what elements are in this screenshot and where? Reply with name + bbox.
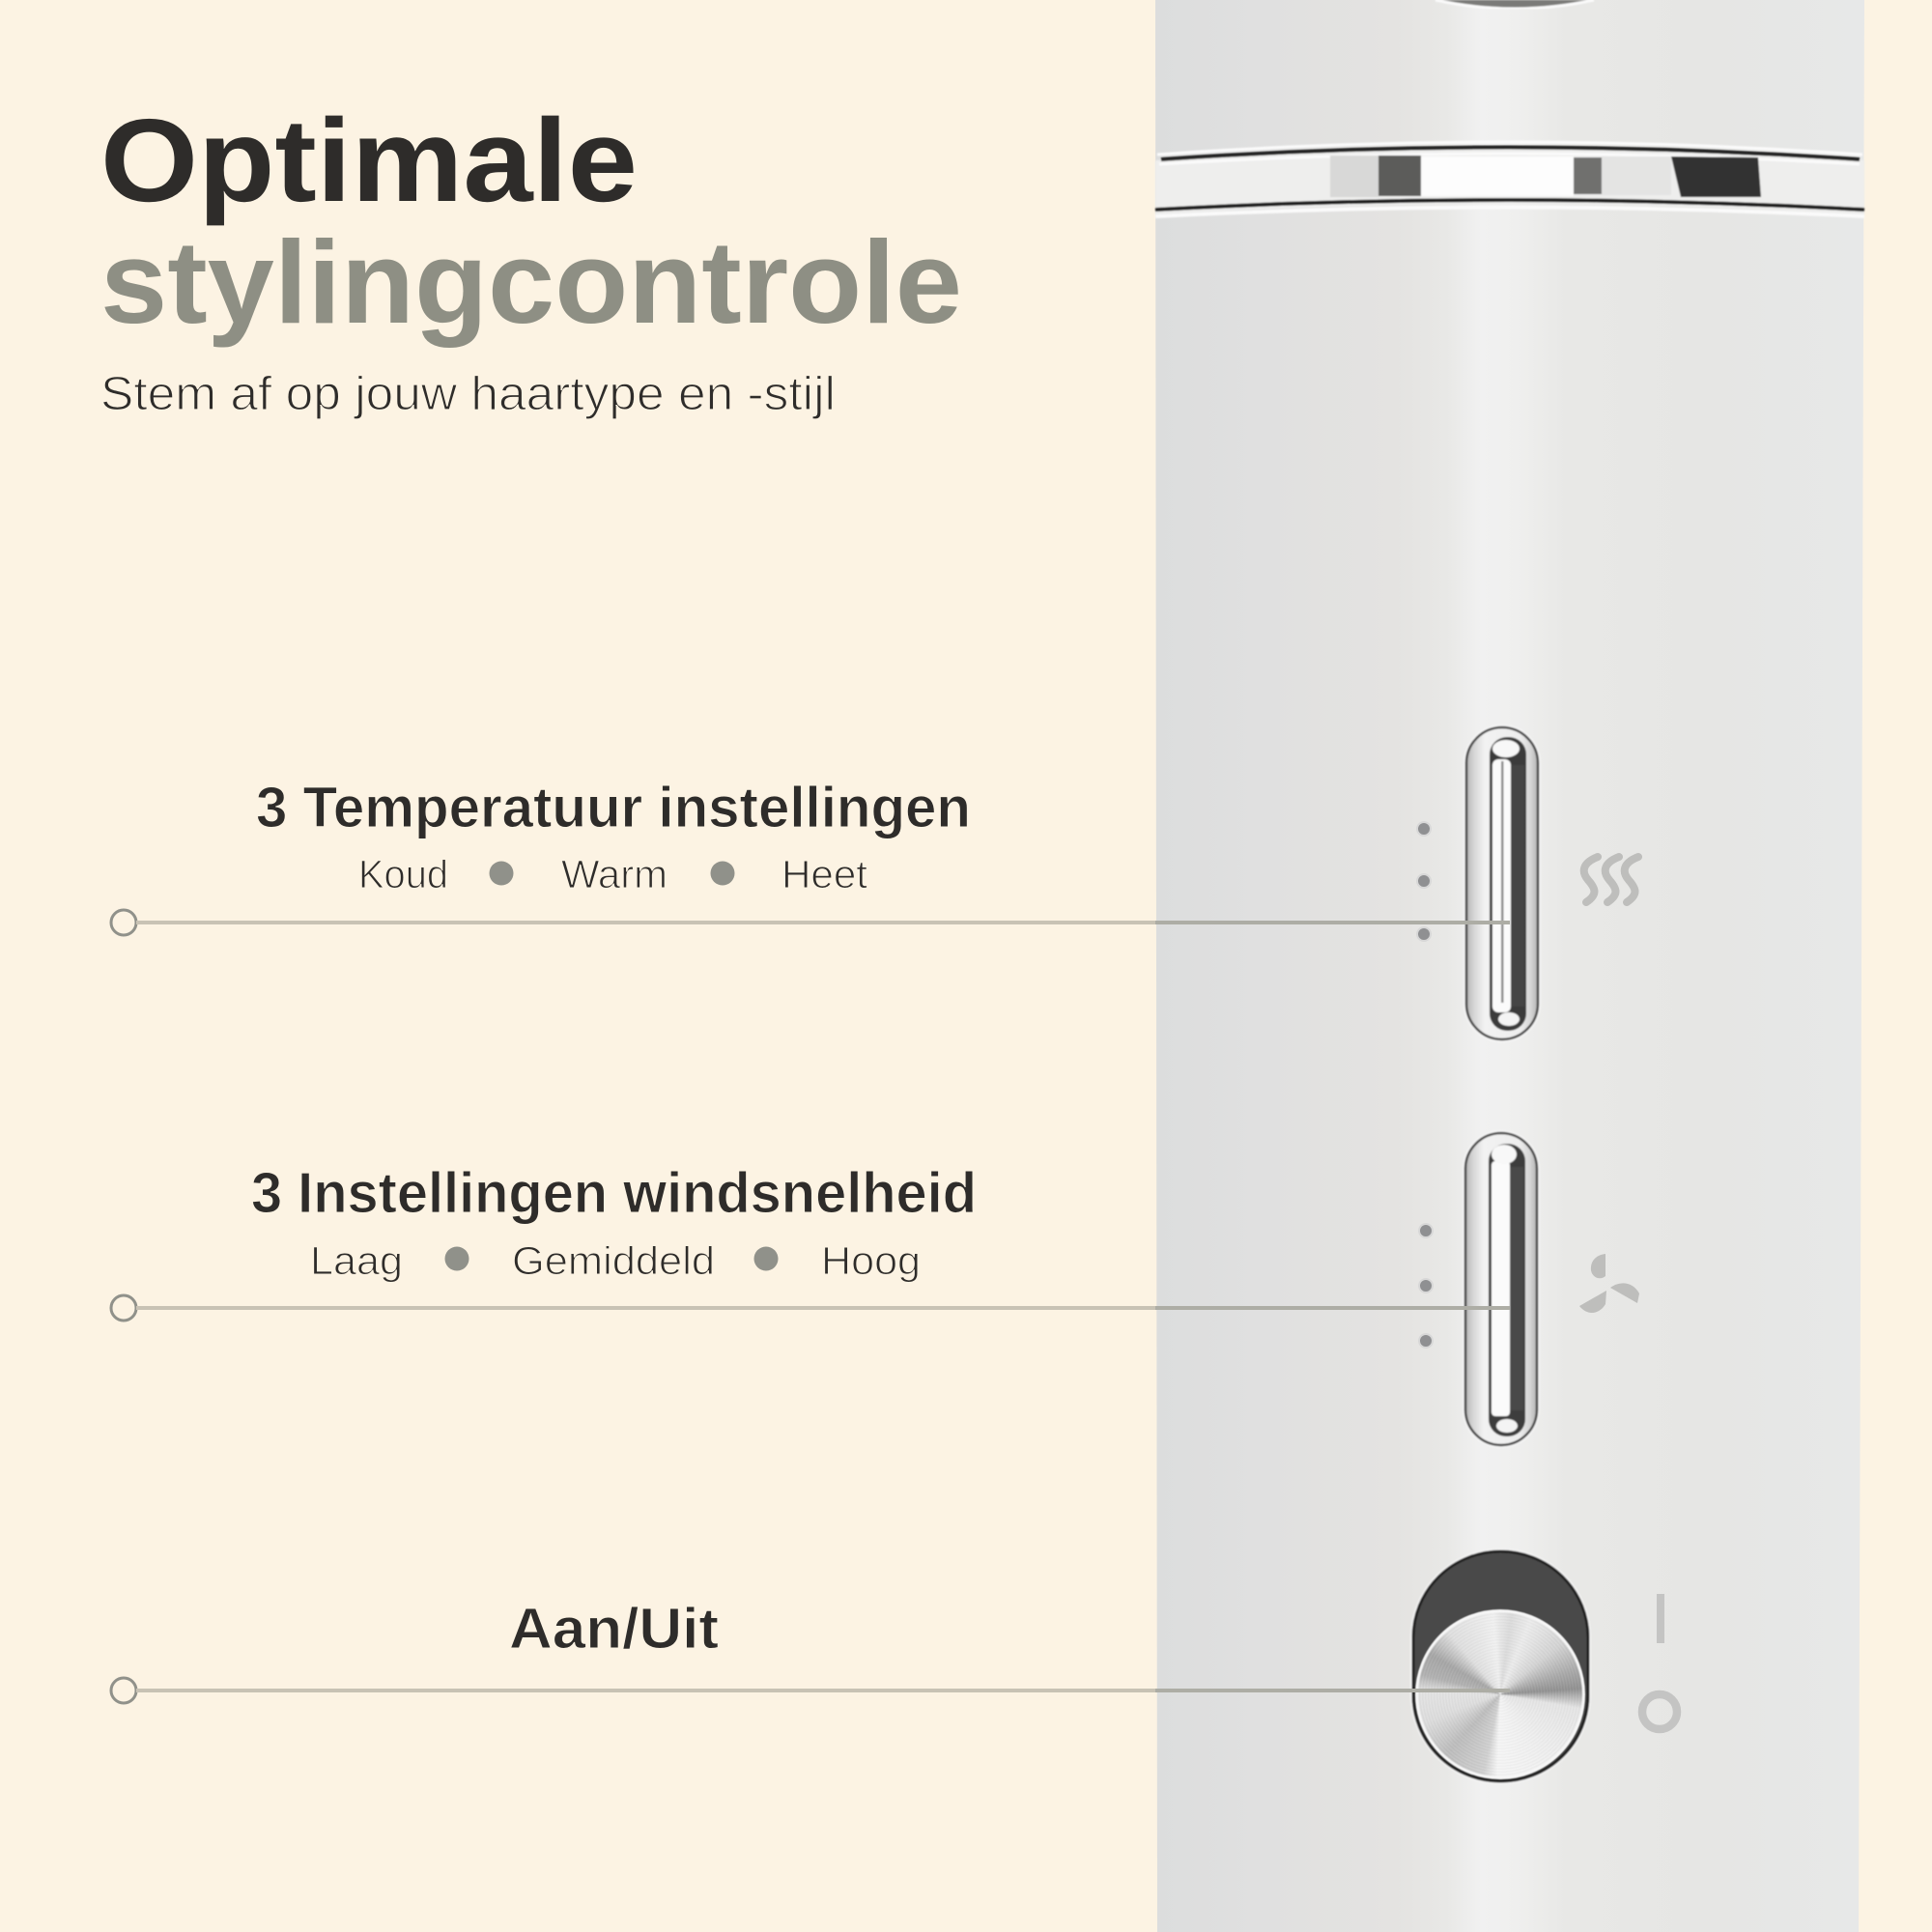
temperature options: Koud [358, 852, 448, 896]
heading: wind speed: 3 Instellingen windsnelheid [251, 1161, 977, 1225]
top chrome detail [1435, 0, 1594, 9]
subtitle: Stem af op jouw haartype en -stijl [100, 368, 836, 420]
metal power knob [1415, 1609, 1585, 1779]
callout: power [111, 1597, 1510, 1703]
callout: wind speed [111, 1161, 1510, 1321]
icon: on mark [1657, 1594, 1664, 1643]
wind speed options [310, 1238, 921, 1283]
callout: temperature [111, 776, 1510, 935]
title: Optimale [100, 95, 638, 226]
temperature indicator dots [1417, 822, 1431, 941]
temperature options [358, 852, 868, 896]
heading: power: Aan/Uit [509, 1597, 719, 1661]
chrome ring [1155, 142, 1864, 216]
title: stylingcontrole [100, 216, 962, 348]
title [100, 95, 962, 348]
heading: temperature: 3 Temperatuur instellingen [256, 776, 971, 839]
wind speed indicator dots [1419, 1224, 1433, 1348]
leader line: power [111, 1678, 1510, 1703]
icon: off mark [1642, 1694, 1677, 1729]
temperature options: Warm [561, 852, 668, 896]
wind speed options: Gemiddeld [512, 1238, 715, 1283]
icon: heat waves [1584, 857, 1638, 902]
temperature options: Heet [781, 852, 868, 896]
leader line: temperature [111, 910, 1510, 935]
wind speed options: Hoog [821, 1238, 921, 1283]
icon: fan [1579, 1254, 1639, 1313]
power switch housing [1410, 1548, 1591, 1784]
temperature slider [1463, 724, 1541, 1042]
wind speed options: Laag [310, 1238, 403, 1283]
leader line: wind speed [111, 1295, 1510, 1321]
panel: dryer body [1155, 0, 1864, 1932]
wind speed slider [1463, 1130, 1540, 1448]
